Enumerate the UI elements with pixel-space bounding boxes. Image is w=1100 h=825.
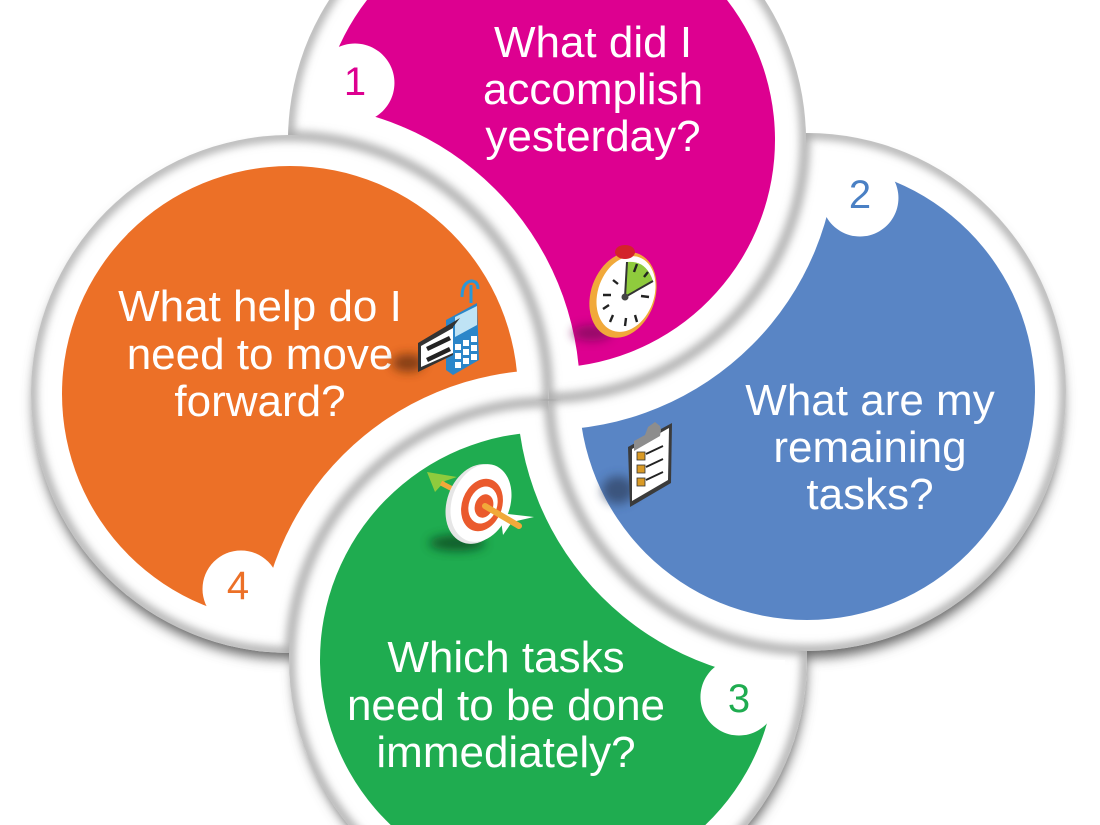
question text 1: accomplish [483,65,703,114]
number 2: 2 [849,173,871,217]
panel: orange question 4 [62,166,518,628]
question text 1: yesterday? [485,112,701,161]
question text 1: What did I [494,18,692,67]
icon: clipboard [602,422,672,507]
panel: green question 3 [320,432,785,825]
question text 3: immediately? [376,728,636,777]
panel: blue question 2 [579,155,1035,620]
icon: phone and card [392,281,479,375]
question text 2: What are my [745,376,995,425]
icon: target with arrow [427,455,534,553]
panel: magenta question 1 [315,0,775,368]
question text 3: Which tasks [387,633,625,682]
number 4: 4 [227,564,249,608]
icon: stopwatch [572,243,668,347]
question text 2: remaining [773,423,967,472]
question text 4: need to move [127,330,393,379]
question text 2: tasks? [806,470,934,519]
number 1: 1 [344,60,366,104]
number 3: 3 [728,677,750,721]
question text 4: What help do I [118,282,402,331]
question text 3: need to be done [347,681,665,730]
question text 4: forward? [174,377,346,426]
